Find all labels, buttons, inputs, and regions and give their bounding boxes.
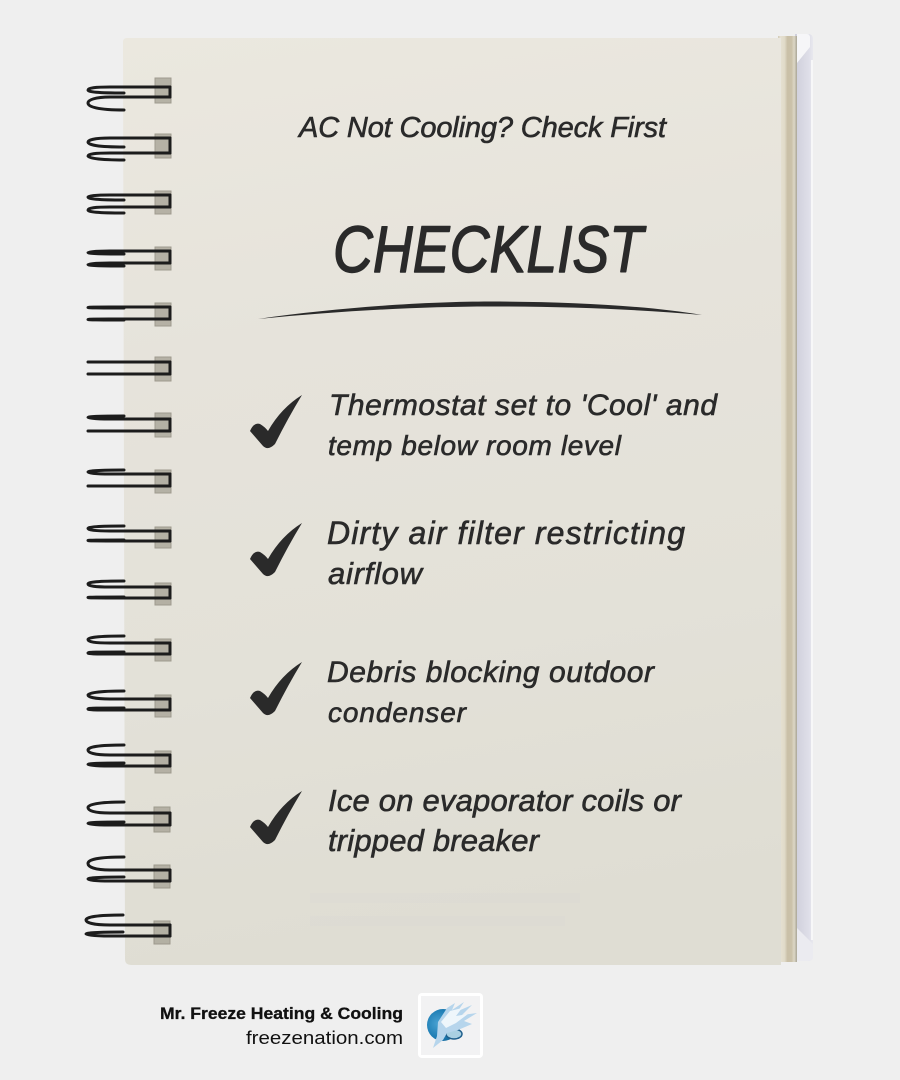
icon: check mark — [250, 395, 302, 448]
icon: check mark — [250, 791, 302, 844]
notebook page — [123, 38, 781, 965]
title: AC Not Cooling? Check First — [297, 112, 668, 144]
icon: blue orb — [427, 1009, 459, 1041]
icon: check mark — [250, 523, 302, 576]
checklist item 4 — [250, 783, 683, 858]
item 3 text — [327, 656, 655, 728]
heading: checklist: CHECKLIST — [333, 212, 647, 286]
item 1 text: Thermostat set to 'Cool' and — [329, 389, 718, 422]
item 2 text: airflow — [328, 556, 425, 591]
checklist item 3 — [250, 656, 655, 728]
item 3 text: condenser — [328, 697, 468, 728]
punched holes — [154, 78, 171, 944]
icon: check mark — [250, 662, 302, 715]
footer website: freezenation.com — [246, 1027, 403, 1048]
ring wires — [86, 87, 170, 936]
item 2 text: Dirty air filter restricting — [327, 515, 685, 551]
item 2 text — [327, 515, 685, 591]
notebook page edges — [778, 36, 797, 962]
item 3 text: Debris blocking outdoor — [327, 656, 655, 689]
item 1 text: temp below room level — [328, 430, 622, 461]
checklist item 1 — [250, 389, 718, 461]
item 4 text: tripped breaker — [328, 823, 541, 858]
heading underline swoosh — [258, 302, 702, 319]
faint show-through text — [310, 893, 580, 926]
item 4 text: Ice on evaporator coils or — [328, 783, 683, 818]
spiral binding — [86, 78, 171, 944]
footer company name: Mr. Freeze Heating & Cooling — [160, 1005, 403, 1023]
checklist item 2 — [250, 515, 685, 591]
icon: ice feather — [433, 1002, 477, 1048]
logo badge — [418, 993, 483, 1058]
notebook back cover — [795, 34, 813, 961]
item 1 text — [328, 389, 718, 461]
icon: lower swirl — [446, 1029, 462, 1039]
item 4 text — [328, 783, 683, 858]
